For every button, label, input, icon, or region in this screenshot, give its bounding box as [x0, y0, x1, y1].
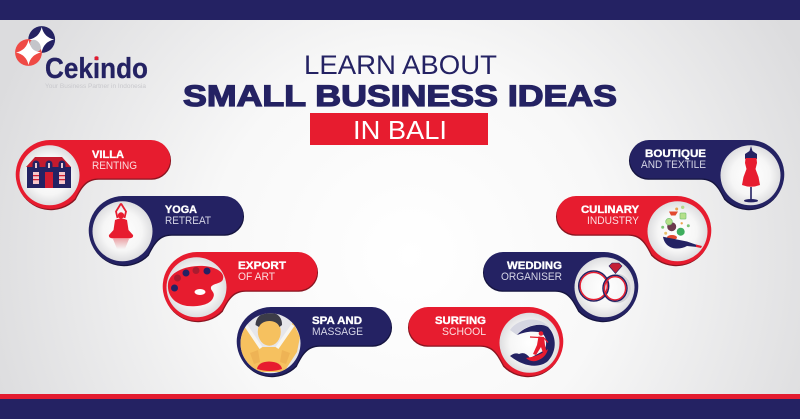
- panel: boutique and textile: [629, 140, 784, 210]
- icon: surfer on wave: [510, 320, 555, 366]
- panel: wedding organiser: [483, 252, 638, 322]
- label: ORGANISER: [501, 271, 562, 283]
- label: [165, 204, 211, 227]
- panel: spa and massage: [237, 307, 392, 377]
- label: [92, 149, 137, 172]
- logo mark: [15, 26, 55, 66]
- label: AND TEXTILE: [641, 159, 706, 171]
- heading line 3 banner: [310, 113, 488, 145]
- label: [641, 148, 706, 171]
- icon: wedding rings: [579, 263, 630, 302]
- heading line 3 banner: IN BALI: [353, 117, 447, 145]
- label: [312, 315, 363, 338]
- heading line 1: LEARN ABOUT: [304, 50, 497, 80]
- icon: paint palette: [168, 266, 223, 306]
- panel: export of art: [163, 252, 318, 322]
- logo tagline: Your Business Partner in Indonesia: [45, 83, 146, 90]
- heading line 2: SMALL BUSINESS IDEAS: [183, 80, 617, 113]
- panel: surfing school: [408, 307, 563, 377]
- panel: yoga retreat: [89, 196, 244, 266]
- label: [581, 204, 640, 227]
- label: INDUSTRY: [587, 215, 640, 227]
- icon: massage: [238, 312, 300, 372]
- title: [183, 50, 617, 145]
- label: RETREAT: [165, 215, 211, 227]
- label: VILLA: [92, 149, 124, 161]
- label: [501, 260, 562, 283]
- label: [435, 315, 486, 338]
- logo wordmark: Cekindo: [45, 53, 148, 85]
- top bar: [0, 0, 800, 20]
- label: EXPORT: [238, 260, 286, 272]
- label: CULINARY: [581, 204, 640, 216]
- label: YOGA: [165, 204, 197, 216]
- icon: villa: [26, 157, 71, 188]
- label: RENTING: [92, 160, 137, 172]
- label: SCHOOL: [442, 326, 486, 338]
- label: MASSAGE: [312, 326, 363, 338]
- bottom bar: [0, 394, 800, 419]
- label: BOUTIQUE: [645, 148, 706, 160]
- panel: culinary industry: [556, 196, 711, 266]
- icon: yoga figure: [109, 204, 133, 249]
- label: SPA AND: [312, 315, 362, 327]
- icon: dress form: [742, 146, 760, 202]
- label: [238, 260, 286, 283]
- label: OF ART: [238, 271, 275, 283]
- label: SURFING: [435, 315, 486, 327]
- icon: wok with vegetables: [661, 206, 702, 249]
- label: WEDDING: [507, 260, 562, 272]
- panel: villa renting: [16, 140, 171, 210]
- logo: [15, 26, 148, 90]
